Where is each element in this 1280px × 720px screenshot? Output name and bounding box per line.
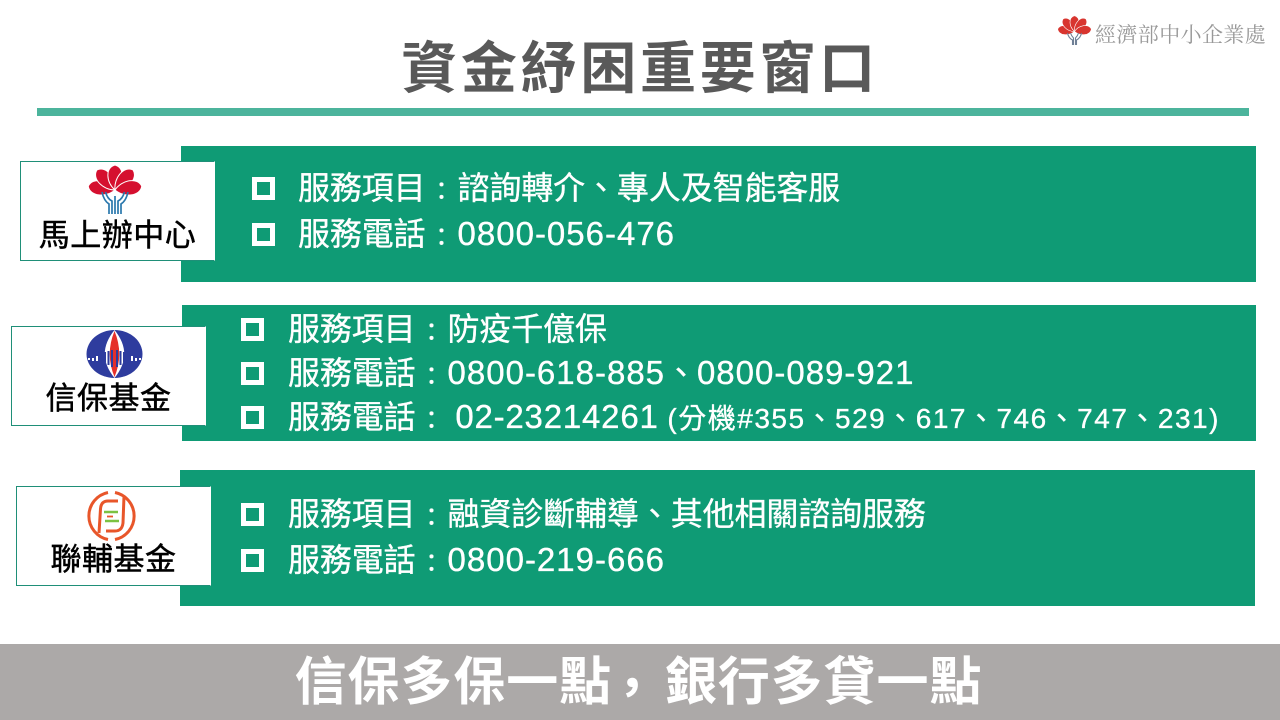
logo card xyxy=(16,486,211,586)
service phone: 服務電話 0800-056-476 xyxy=(298,215,675,252)
service phone: 服務電話 0800-219-666 xyxy=(288,541,665,578)
service item: 服務項目 諮詢轉介、專人及智能客服 xyxy=(298,170,840,206)
panel: 聯輔基金 xyxy=(16,470,1255,606)
name: 信保基金 xyxy=(46,381,172,416)
service phones: 服務電話 0800-618-885、0800-089-921 xyxy=(288,354,914,391)
agency logo and name xyxy=(1058,16,1266,47)
agency name: 經濟部中小企業處 xyxy=(1095,23,1266,47)
checkbox xyxy=(241,549,264,572)
checkbox xyxy=(241,406,264,429)
slogan banner xyxy=(0,644,1280,720)
service item: ： xyxy=(429,178,454,206)
panel: 信保基金 xyxy=(11,305,1256,441)
service item: ： xyxy=(419,504,444,532)
title: 資金紓困重要窗口 xyxy=(401,37,879,100)
icon: blue circle emblem xyxy=(86,330,142,378)
green background xyxy=(181,146,1256,282)
service phone: ： xyxy=(429,224,454,252)
service phone with extensions: 服務電話 02-23214261 (分機#355、529、617、746、747、231) xyxy=(288,398,1220,435)
checkbox xyxy=(252,223,275,246)
service phone with extensions: ： xyxy=(419,407,444,435)
logo card xyxy=(20,161,215,261)
name: 馬上辦中心 xyxy=(39,218,196,253)
checkbox xyxy=(241,503,264,526)
green background xyxy=(180,470,1255,606)
checkbox xyxy=(252,177,275,200)
green background xyxy=(182,305,1256,441)
icon: agency emblem xyxy=(1058,16,1091,45)
service item: 服務項目 防疫千億保 xyxy=(288,311,607,347)
panel: 馬上辦中心 xyxy=(20,146,1256,282)
title underline xyxy=(37,108,1249,116)
icon: orange circle emblem xyxy=(87,491,136,541)
service phones: ： xyxy=(419,363,444,391)
service item: ： xyxy=(419,319,444,347)
service phone: ： xyxy=(419,550,444,578)
slogan banner: 信保多保一點，銀行多貸一點 xyxy=(295,654,982,718)
checkbox xyxy=(241,362,264,385)
checkbox xyxy=(241,318,264,341)
icon: red flower emblem xyxy=(88,166,142,214)
service item: 服務項目 融資診斷輔導、其他相關諮詢服務 xyxy=(288,496,926,532)
logo card xyxy=(11,326,206,426)
name: 聯輔基金 xyxy=(50,542,176,577)
